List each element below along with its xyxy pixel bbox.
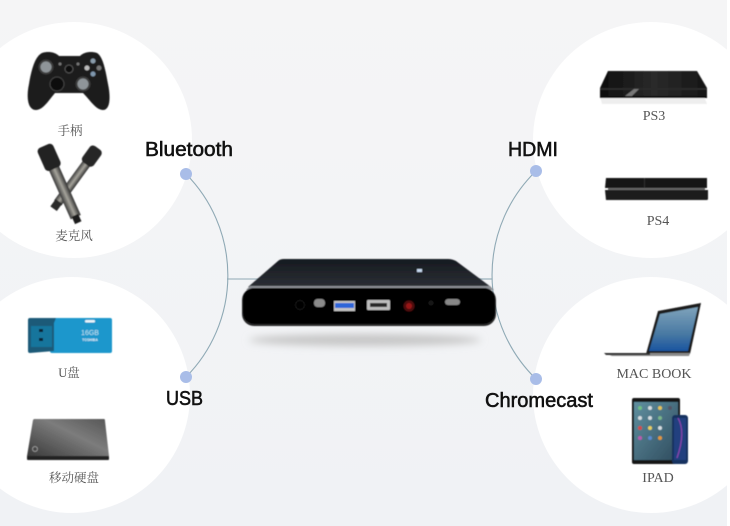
caption: laptop: MAC BOOK — [616, 367, 692, 382]
icon: hard disk — [27, 419, 109, 460]
caption: gamepad: 手柄 — [57, 123, 83, 138]
heading: USB: USB — [166, 388, 203, 410]
icon: usb drive — [28, 318, 112, 353]
right connector lines — [476, 171, 536, 379]
panel: chromecast circle — [533, 277, 730, 513]
icon: hdmi dot — [530, 165, 542, 177]
caption: tablet: IPAD — [642, 471, 674, 486]
icon: ps3 player — [600, 71, 707, 104]
icon: usb drive: 16GB — [81, 330, 99, 337]
icon: laptop — [604, 303, 701, 356]
icon: gamepad — [28, 52, 110, 110]
device: media box — [242, 259, 496, 326]
icon: usb dot — [180, 371, 192, 383]
icon: microphones — [36, 142, 103, 226]
heading: Bluetooth: Bluetooth — [145, 139, 233, 161]
panel: hdmi circle — [533, 22, 730, 258]
icon: oval slot — [445, 299, 460, 305]
icon: audio jack — [296, 300, 304, 310]
icon: hdmi port — [367, 300, 390, 310]
caption: ps3: PS3 — [643, 109, 665, 124]
left connector lines — [186, 174, 262, 377]
icon: usb drive: TOSHIBA — [82, 338, 98, 342]
icon: chromecast dot — [530, 373, 542, 385]
icon: usb port — [334, 301, 355, 311]
caption: ps4: PS4 — [647, 214, 669, 229]
device shadow — [249, 334, 481, 346]
panel: usb circle — [0, 277, 190, 513]
panel: bluetooth circle — [0, 22, 192, 258]
icon: ps4 console — [605, 178, 708, 200]
caption: hard disk: 移动硬盘 — [49, 470, 99, 485]
caption: usb drive: U盘 — [58, 366, 80, 380]
heading: HDMI: HDMI — [508, 139, 558, 161]
icon: small hole — [428, 300, 434, 306]
icon: bluetooth dot — [180, 168, 192, 180]
icon: button — [314, 299, 325, 307]
caption: microphone: 麦克风 — [55, 229, 93, 243]
icon: tablet and phone — [632, 398, 688, 464]
icon: led — [417, 269, 422, 272]
heading: Chromecast: Chromecast — [485, 390, 593, 412]
icon: red button — [404, 300, 414, 312]
